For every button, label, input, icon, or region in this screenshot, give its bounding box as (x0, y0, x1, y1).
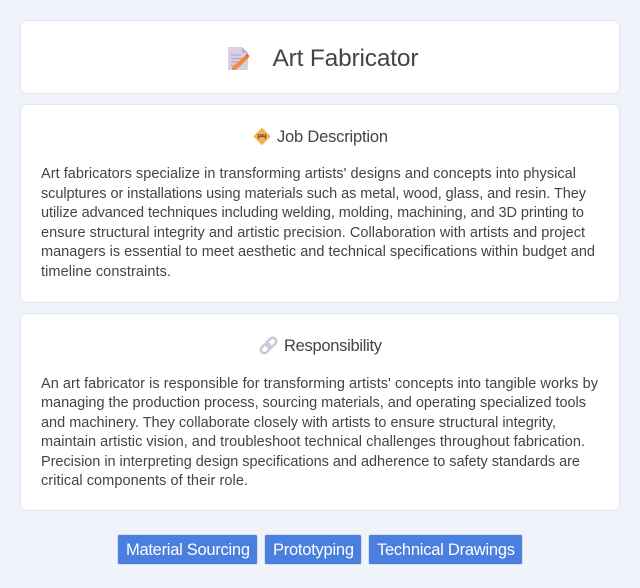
text block: job description (41, 166, 595, 280)
text block: responsibility (41, 376, 599, 489)
tag: technical drawings (368, 534, 522, 564)
text block: responsibility: critical components of their role. (41, 473, 248, 489)
heading: job description: Job Description (277, 128, 388, 146)
tag: material sourcing: Material Sourcing (126, 541, 250, 559)
text block: responsibility: An art fabricator is responsible for transforming artists' concepts into tangible works by (41, 376, 599, 392)
tag: prototyping: Prototyping (273, 541, 354, 559)
icon: document with pencil (228, 47, 250, 70)
tag: material sourcing (118, 534, 258, 564)
icon: road sign diamond (254, 128, 270, 144)
text block: job description: ensure structural integrity and artistic precision. Collaboration with artists and project (41, 225, 585, 241)
text block: responsibility: and machinery. They collaborate closely with artists to ensure structural integrity, (41, 415, 556, 431)
text block: job description: managers is essential to meet aesthetic and technical specifications within budget and (41, 244, 595, 260)
text block: job description: Art fabricators specialize in transforming artists' designs and concepts into physical (41, 166, 576, 182)
panel: job description (20, 104, 620, 302)
tag: prototyping (264, 534, 362, 564)
text block: responsibility: Precision in interpreting design specifications and adherence to safety standards are (41, 454, 580, 470)
panel: title card (20, 20, 620, 94)
text block: responsibility: managing the production process, sourcing materials, and operating specialized tools (41, 395, 586, 411)
tag: technical drawings: Technical Drawings (377, 541, 515, 559)
icon: link (259, 336, 278, 355)
text block: responsibility: maintain artistic vision, and troubleshoot technical challenges throughout fabrication. (41, 434, 585, 450)
title: Art Fabricator (272, 45, 418, 72)
text block: job description: utilize advanced techniques including welding, molding, machining, and 3D printing to (41, 205, 584, 221)
text block: job description: timeline constraints. (41, 264, 171, 280)
heading: responsibility: Responsibility (284, 337, 383, 355)
panel: responsibility (20, 314, 620, 510)
text block: job description: sculptures or installations using materials such as metal, wood, glass, and resin. They (41, 186, 587, 202)
